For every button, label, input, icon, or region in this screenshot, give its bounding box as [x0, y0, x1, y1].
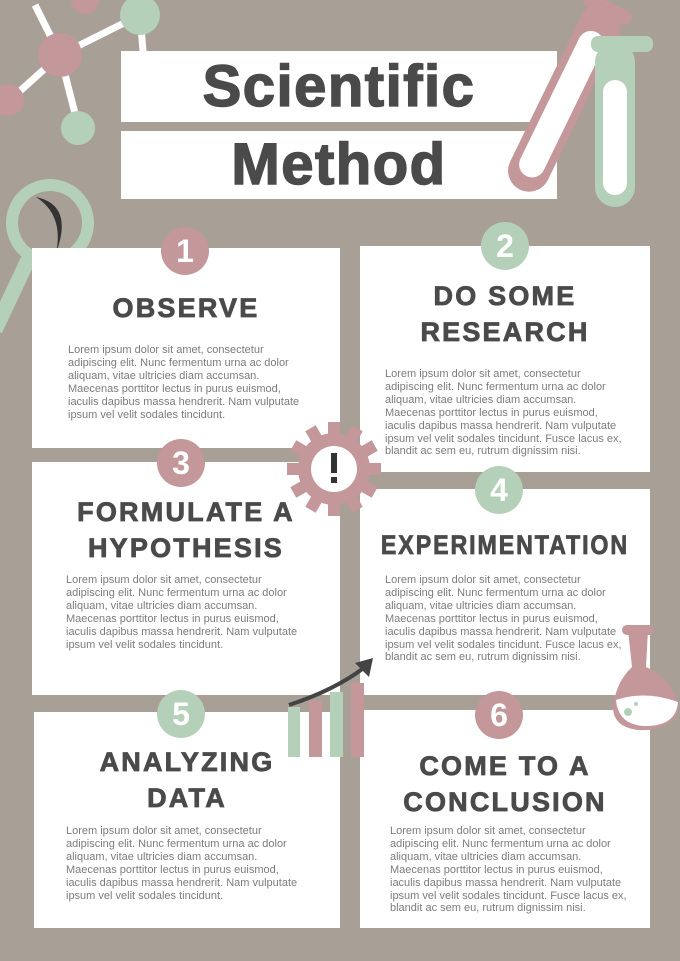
- number 3: [157, 439, 205, 487]
- title: Scientific: [203, 54, 475, 119]
- panel: 1 observe: ipsum vel velit sodales tincidunt.: [68, 409, 225, 421]
- panel: 2 research: Maecenas porttitor lectus in purus euismod,: [385, 407, 598, 419]
- panel: 1 observe: OBSERVE: [113, 293, 259, 323]
- panel: 2 research: iaculis dapibus massa hendrerit. Nam vulputate: [385, 420, 616, 432]
- icon: test tubes: [508, 0, 653, 207]
- number 4: [475, 466, 523, 514]
- icon: magnifier: [0, 179, 94, 334]
- panel: 5 analyzing: ipsum vel velit sodales tincidunt.: [66, 890, 223, 902]
- title: Method: [231, 132, 447, 197]
- panel: 3 hypothesis: Maecenas porttitor lectus in purus euismod,: [66, 613, 279, 625]
- panel: 5 analyzing: Lorem ipsum dolor sit amet, consectetur: [66, 825, 262, 837]
- panel: 2 research: aliquam, vitae ultricies diam accumsan.: [385, 394, 576, 406]
- panel: 6 conclusion: adipiscing elit. Nunc fermentum urna ac dolor: [390, 838, 611, 850]
- panel: 4 experimentation: aliquam, vitae ultricies diam accumsan.: [385, 600, 576, 612]
- panel: 3 hypothesis: aliquam, vitae ultricies diam accumsan.: [66, 600, 257, 612]
- panel: 2 research: DO SOME: [434, 281, 576, 311]
- panel: 5 analyzing: aliquam, vitae ultricies diam accumsan.: [66, 851, 257, 863]
- icon: bar chart with arrow: [288, 658, 373, 757]
- number 3: 3: [172, 445, 190, 481]
- icon: molecule: [0, 0, 160, 145]
- number 4: 4: [490, 472, 508, 508]
- panel: 6 conclusion: COME TO A: [419, 751, 591, 781]
- title: [121, 51, 557, 199]
- panel: 3 hypothesis: ipsum vel velit sodales tincidunt.: [66, 639, 223, 651]
- panel: 3 hypothesis: [32, 462, 340, 695]
- panel: 4 experimentation: adipiscing elit. Nunc fermentum urna ac dolor: [385, 587, 606, 599]
- panel: 5 analyzing: iaculis dapibus massa hendrerit. Nam vulputate: [66, 877, 297, 889]
- panel: 3 hypothesis: FORMULATE A: [77, 497, 295, 527]
- panel: 2 research: Lorem ipsum dolor sit amet, consectetur: [385, 368, 581, 380]
- panel: 5 analyzing: adipiscing elit. Nunc fermentum urna ac dolor: [66, 838, 287, 850]
- panel: 5 analyzing: ANALYZING: [100, 747, 274, 777]
- panel: 4 experimentation: iaculis dapibus massa hendrerit. Nam vulputate: [385, 626, 616, 638]
- panel: 4 experimentation: Maecenas porttitor lectus in purus euismod,: [385, 613, 598, 625]
- panel: 4 experimentation: blandit ac sem eu, rutrum dignissim nisi.: [385, 651, 581, 663]
- panel: 6 conclusion: Maecenas porttitor lectus in purus euismod,: [390, 864, 603, 876]
- number 5: 5: [172, 696, 190, 732]
- number 2: [481, 222, 529, 270]
- panel: 1 observe: [32, 248, 340, 448]
- panel: 5 analyzing: Maecenas porttitor lectus in purus euismod,: [66, 864, 279, 876]
- panel: 1 observe: Lorem ipsum dolor sit amet, consectetur: [68, 344, 264, 356]
- panel: 6 conclusion: iaculis dapibus massa hendrerit. Nam vulputate: [390, 877, 621, 889]
- panel: 5 analyzing: [34, 712, 340, 928]
- number 2: 2: [496, 228, 514, 264]
- panel: 2 research: blandit ac sem eu, rutrum dignissim nisi.: [385, 445, 581, 457]
- panel: 3 hypothesis: HYPOTHESIS: [88, 533, 284, 563]
- panel: 6 conclusion: blandit ac sem eu, rutrum dignissim nisi.: [390, 902, 586, 914]
- panel: 4 experimentation: ipsum vel velit sodales tincidunt. Fusce lacus ex,: [385, 639, 622, 651]
- panel: 3 hypothesis: Lorem ipsum dolor sit amet, consectetur: [66, 574, 262, 586]
- panel: 2 research: ipsum vel velit sodales tincidunt. Fusce lacus ex,: [385, 433, 622, 445]
- panel: 2 research: RESEARCH: [420, 317, 590, 347]
- panel: 2 research: adipiscing elit. Nunc fermentum urna ac dolor: [385, 381, 606, 393]
- panel: 1 observe: iaculis dapibus massa hendrerit. Nam vulputate: [68, 396, 299, 408]
- number 6: [475, 691, 523, 739]
- panel: 3 hypothesis: iaculis dapibus massa hendrerit. Nam vulputate: [66, 626, 297, 638]
- panel: 1 observe: Maecenas porttitor lectus in purus euismod,: [68, 383, 281, 395]
- panel: 1 observe: adipiscing elit. Nunc fermentum urna ac dolor: [68, 357, 289, 369]
- number 1: [161, 227, 209, 275]
- panel: 1 observe: aliquam, vitae ultricies diam accumsan.: [68, 370, 259, 382]
- icon: gear: [287, 422, 381, 516]
- panel: 6 conclusion: Lorem ipsum dolor sit amet, consectetur: [390, 825, 586, 837]
- panel: 3 hypothesis: adipiscing elit. Nunc fermentum urna ac dolor: [66, 587, 287, 599]
- number 5: [157, 690, 205, 738]
- number 6: 6: [490, 697, 508, 733]
- panel: 4 experimentation: Lorem ipsum dolor sit amet, consectetur: [385, 574, 581, 586]
- icon: flask: [613, 625, 678, 730]
- panel: 4 experimentation: [360, 489, 650, 695]
- number 1: 1: [176, 233, 194, 269]
- panel: 6 conclusion: aliquam, vitae ultricies diam accumsan.: [390, 851, 581, 863]
- panel: 5 analyzing: DATA: [147, 783, 227, 813]
- panel: 6 conclusion: CONCLUSION: [403, 787, 607, 817]
- panel: 2 research: [360, 246, 650, 472]
- panel: 6 conclusion: [360, 710, 650, 928]
- panel: 4 experimentation: EXPERIMENTATION: [381, 530, 629, 560]
- panel: 6 conclusion: ipsum vel velit sodales tincidunt. Fusce lacus ex,: [390, 890, 627, 902]
